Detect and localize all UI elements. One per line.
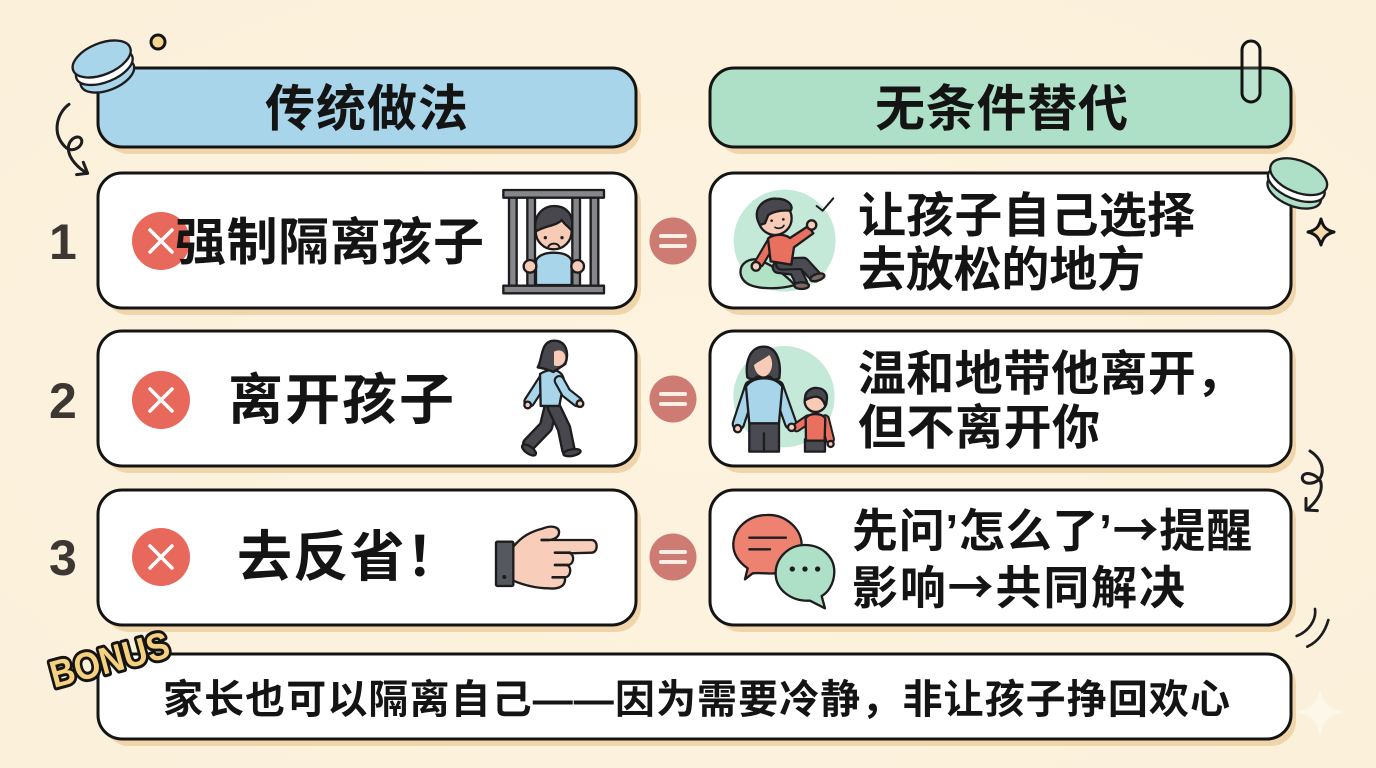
- badge: BONUS: BONUS: [45, 625, 174, 697]
- text: let the child choose: 让孩子自己选择: [858, 190, 1195, 243]
- panel: row 1 traditional: [98, 173, 641, 315]
- text: let the child choose: [858, 190, 1195, 297]
- header: unconditional alternative: 无条件替代: [875, 81, 1128, 137]
- icon: red cross: [132, 371, 190, 429]
- icon: blue macaron: [67, 33, 139, 100]
- panel: row 3 traditional: [98, 490, 641, 632]
- panel: row 2 alternative: [710, 331, 1296, 473]
- row number 2: 2: [49, 373, 77, 429]
- text: bonus message: 家长也可以隔离自己——因为需要冷静，非让孩子挣回欢心: [163, 678, 1230, 722]
- text: lead gently: [858, 348, 1244, 455]
- header: traditional approach: [98, 68, 641, 154]
- icon: paperclip: [1242, 41, 1260, 102]
- icon: small dot: [151, 35, 165, 49]
- icon: sparkle: [1308, 219, 1334, 245]
- icon: parent holding child's hand: [733, 346, 835, 452]
- text: forced isolation: 强制隔离孩子: [175, 214, 484, 271]
- row number 1: 1: [49, 214, 77, 270]
- icon: equals 1: [650, 218, 696, 264]
- icon: curly arrow right: [1302, 451, 1322, 511]
- icon: red cross: [132, 528, 190, 586]
- header: traditional approach: 传统做法: [265, 81, 468, 137]
- icon: pointing hand: [496, 527, 597, 589]
- text: go reflect: 去反省！: [237, 526, 461, 588]
- panel: row 3 alternative: [710, 490, 1296, 632]
- text: lead gently: 温和地带他离开，: [858, 348, 1244, 401]
- text: lead gently: 但不离开你: [858, 402, 1100, 455]
- text: ask first: [852, 495, 1252, 618]
- text: let the child choose: 去放松的地方: [858, 244, 1145, 297]
- icon: faint sparkle: [1296, 689, 1344, 736]
- icon: motion arcs: [1297, 609, 1328, 647]
- icon: equals 2: [650, 376, 696, 422]
- icon: child behind bars: [503, 190, 604, 293]
- icon: equals 3: [650, 534, 696, 580]
- icon: speech bubbles: [733, 515, 834, 608]
- icon: curly arrow left: [57, 104, 88, 175]
- text: leave the child: 离开孩子: [228, 369, 454, 431]
- icon: child on beanbag: [734, 190, 836, 292]
- header: unconditional alternative: [710, 68, 1296, 154]
- icon: person walking away: [520, 341, 583, 458]
- text: ask first: 先问’怎么了’→提醒: [852, 495, 1252, 561]
- icon: green macaron: [1263, 151, 1332, 216]
- panel: bonus: [98, 654, 1296, 746]
- icon: red cross: [132, 212, 190, 270]
- panel: row 2 traditional: [98, 331, 641, 473]
- row number 3: 3: [49, 530, 77, 586]
- panel: row 1 alternative: [710, 173, 1296, 315]
- text: ask first: 影响→共同解决: [852, 552, 1185, 618]
